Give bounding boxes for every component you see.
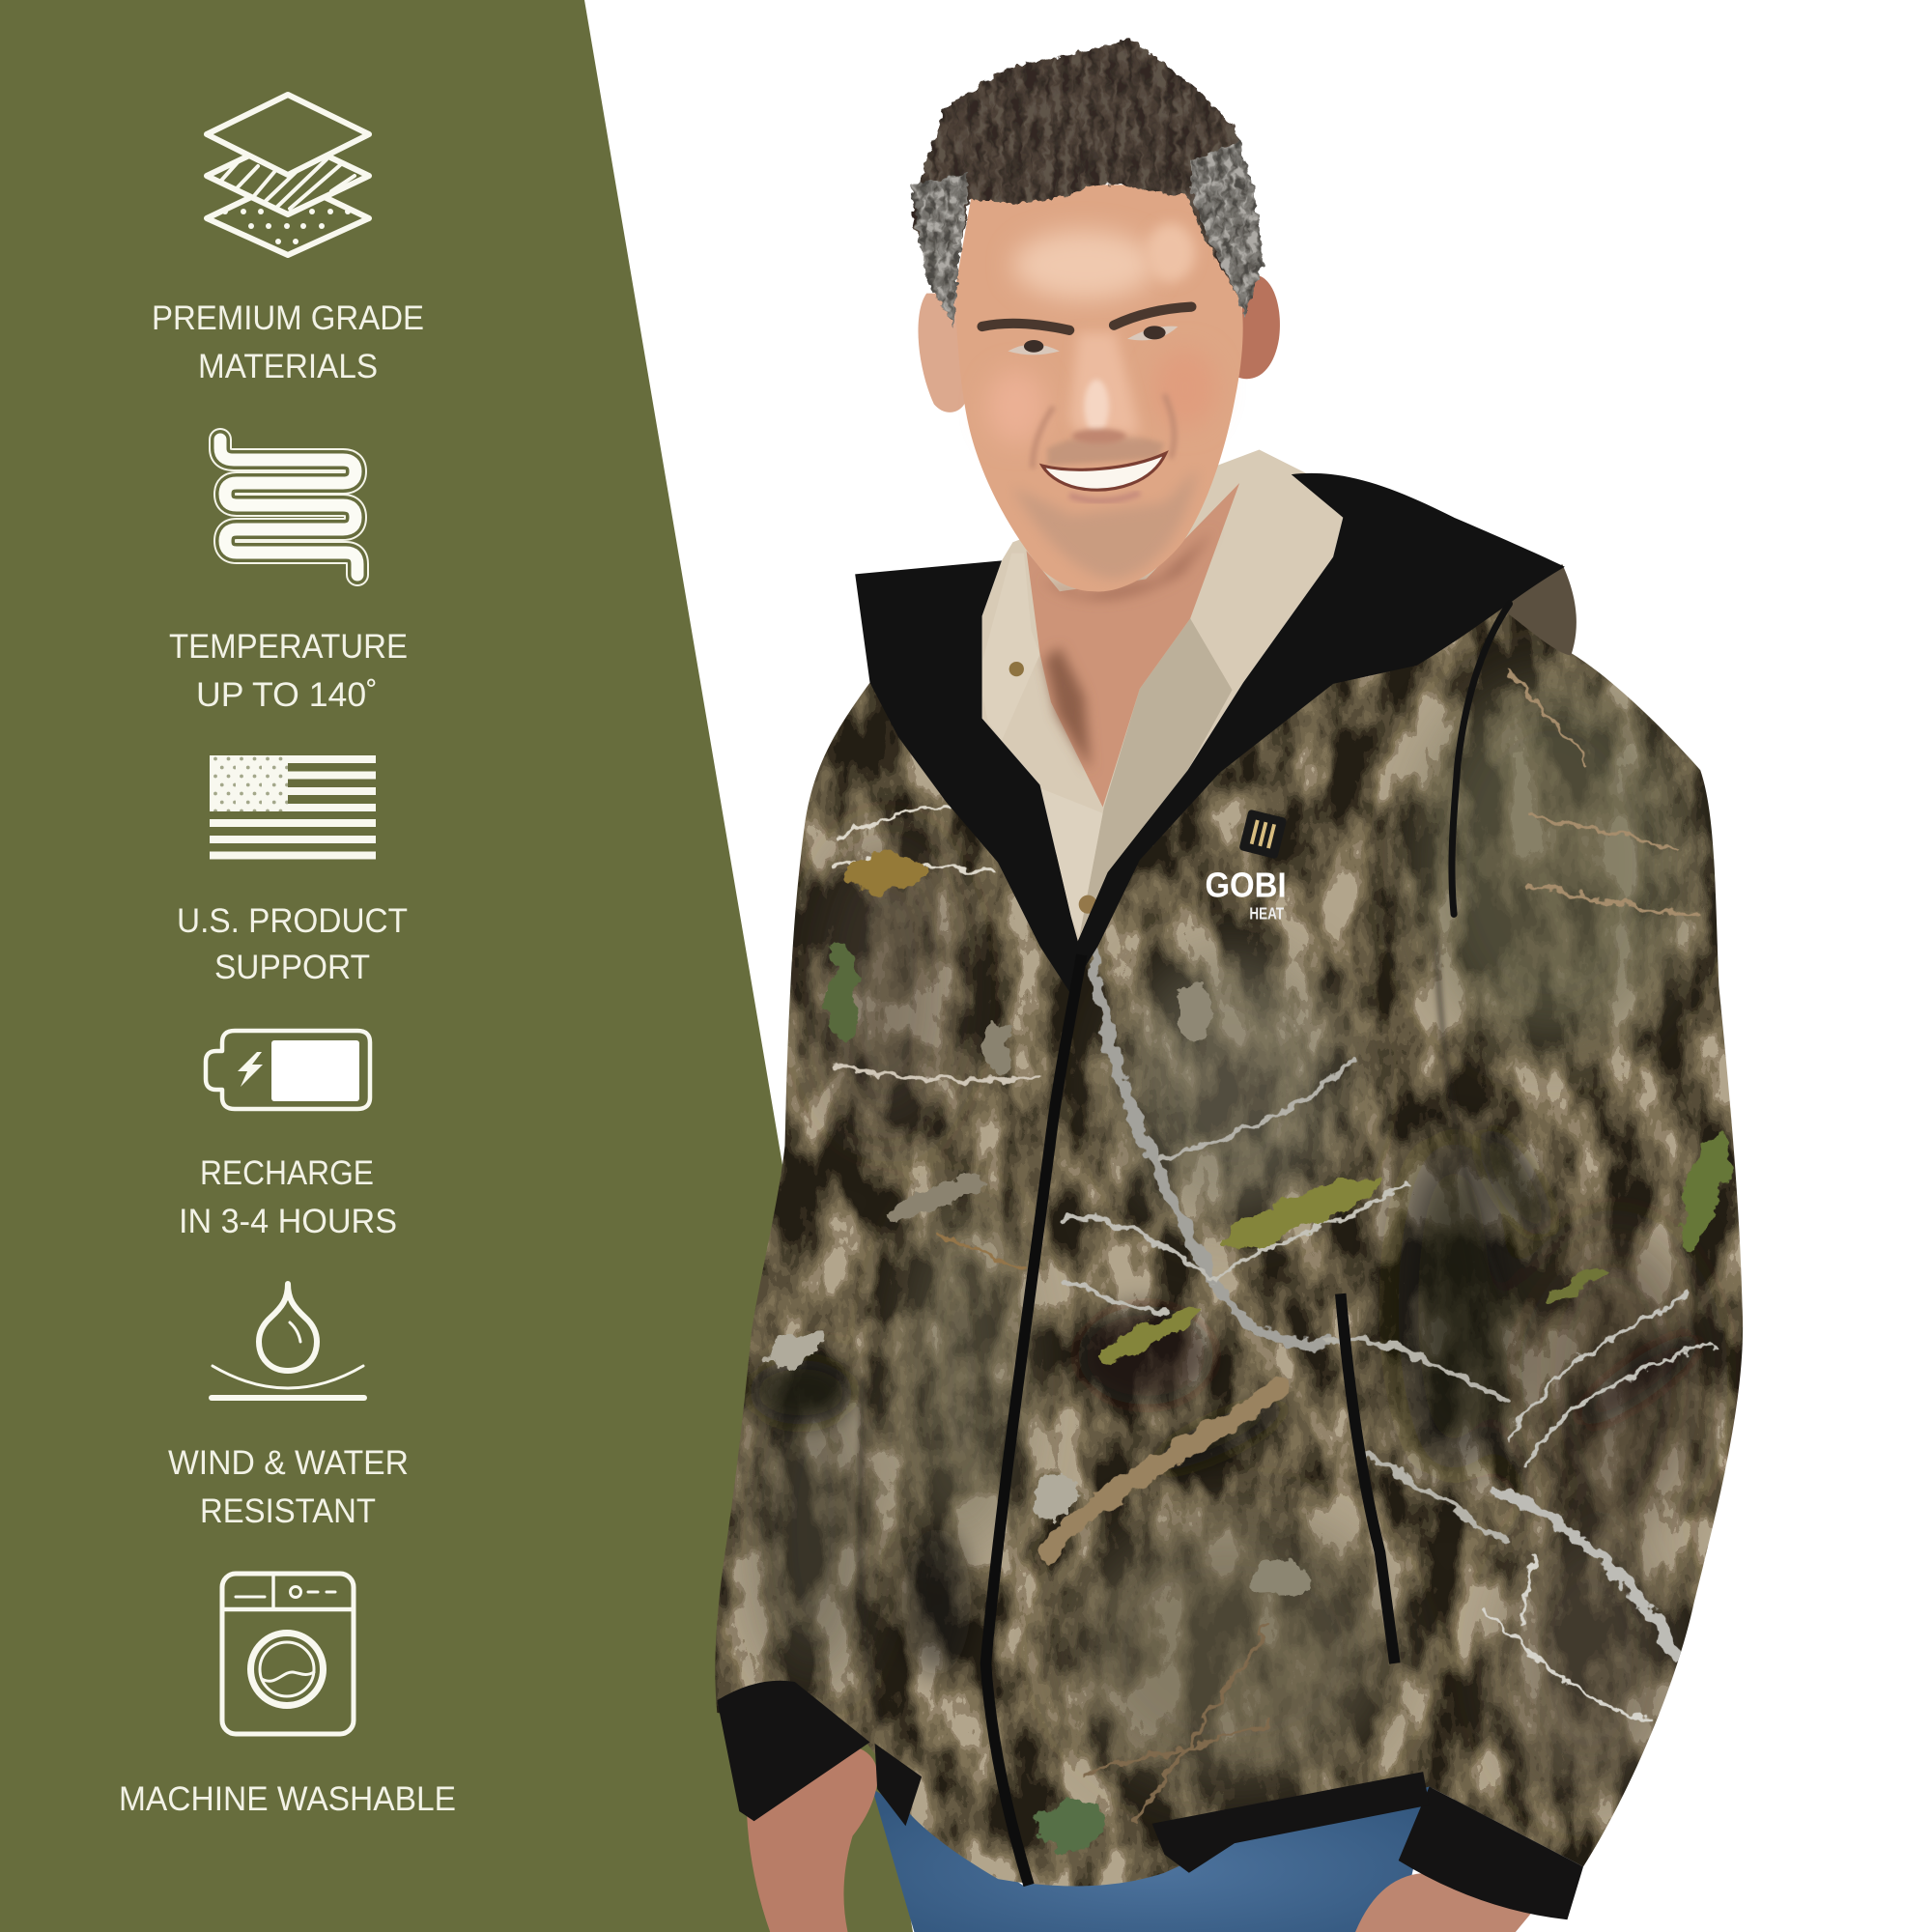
smile (1042, 453, 1166, 490)
label: premium grade materials (152, 299, 424, 385)
black rib cuffs and hem (717, 1681, 1583, 1919)
hair (887, 25, 1293, 357)
icon: charging battery (206, 1031, 370, 1109)
button placket light (1041, 788, 1103, 936)
nose (1069, 332, 1140, 434)
branches (838, 671, 1713, 1824)
label: temperature up to 140 (169, 628, 408, 714)
icon: american flag (210, 755, 376, 860)
left hand in pocket (747, 1747, 878, 1932)
icon: material layers (207, 95, 369, 255)
sleeve fold shadows (860, 936, 1503, 1725)
camo jacket (715, 611, 1743, 1886)
jacket logo: Gobi Heat: HEAT (1249, 904, 1284, 923)
camo tonal patches (752, 678, 1700, 1799)
right ear (1237, 274, 1280, 379)
icon: water drop on fabric (212, 1284, 364, 1398)
jeans (872, 1775, 1435, 1932)
hood exterior camo (1454, 564, 1577, 656)
face (956, 185, 1243, 591)
drawstring (1452, 604, 1509, 914)
label: temperature up to 140: UP TO 140˚ (196, 676, 378, 714)
icon: heating coil (220, 440, 357, 575)
stubble (1012, 469, 1198, 579)
left ear (918, 294, 967, 412)
left shirt collar flap (979, 554, 1040, 741)
label: wind and water resistant: WIND & WATER (168, 1444, 409, 1482)
camo dark shadows (750, 1119, 1711, 1676)
feature: U.S. product support (177, 755, 408, 986)
label: premium grade materials: MATERIALS (198, 348, 378, 385)
beige shirt (982, 450, 1343, 947)
feature: machine washable (119, 1574, 456, 1818)
label: machine washable: MACHINE WASHABLE (119, 1780, 456, 1818)
cheek folds (1033, 394, 1175, 469)
label: recharge in 3-4 hours: RECHARGE (200, 1154, 374, 1192)
icon: washing machine (222, 1574, 354, 1734)
feature: temperature (169, 440, 408, 714)
label: U.S. product support: U.S. PRODUCT (177, 902, 408, 940)
label: wind and water resistant: RESISTANT (200, 1492, 376, 1530)
jacket logo: Gobi Heat (1205, 810, 1287, 923)
photo: smiling man in camo jacket (702, 25, 1762, 1932)
heat control button (1238, 810, 1287, 859)
label: recharge in 3-4 hours (179, 1154, 397, 1240)
feature: recharge time (179, 1031, 397, 1240)
lower lip (1069, 493, 1140, 501)
right hand (1355, 1873, 1534, 1932)
collar buttons (1009, 662, 1097, 914)
feature: premium grade materials (152, 95, 424, 385)
label: recharge in 3-4 hours: IN 3-4 HOURS (179, 1203, 397, 1240)
neck (1026, 483, 1239, 807)
label: U.S. product support (177, 902, 408, 986)
eyebrows (982, 307, 1191, 330)
feature: wind and water resistant (168, 1284, 409, 1530)
eyes (1008, 326, 1178, 355)
label: temperature up to 140: TEMPERATURE (169, 628, 408, 666)
jacket zipper (985, 955, 1082, 1886)
label: U.S. product support: SUPPORT (214, 949, 370, 986)
light bark patches (763, 979, 1311, 1597)
label: wind and water resistant (168, 1444, 409, 1530)
right shirt placket shading (1079, 618, 1233, 936)
pocket zipper (1341, 1293, 1395, 1663)
moss and leaves (829, 855, 1740, 1851)
black hood lining (855, 473, 1565, 992)
panel: olive feature column (0, 0, 913, 1932)
jacket logo: Gobi Heat: GOBI (1205, 867, 1287, 905)
label: premium grade materials: PREMIUM GRADE (152, 299, 424, 337)
